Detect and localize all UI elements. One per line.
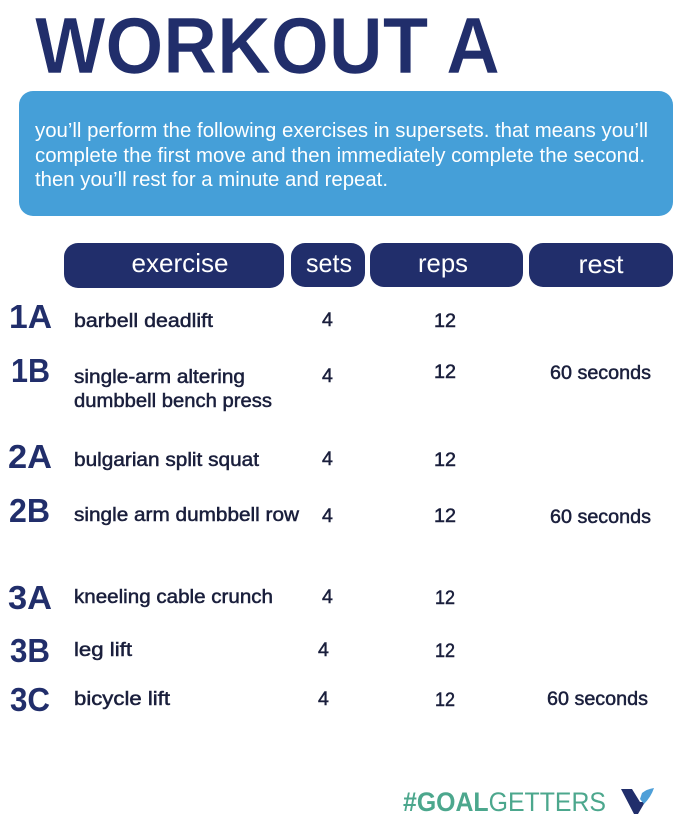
- row 2B: single arm dumbbell row: [74, 504, 300, 526]
- row 2B: 60 seconds: [550, 506, 651, 528]
- header: rest: rest: [578, 249, 624, 279]
- row 3C: 3C: [10, 681, 50, 718]
- title: WORKOUT A: [35, 1, 500, 90]
- row 1B: 12: [434, 361, 456, 383]
- header: exercise: exercise: [132, 248, 228, 278]
- row 1B: single-arm altering: [74, 366, 245, 388]
- row 3C: 12: [435, 689, 455, 711]
- header: reps: [370, 243, 523, 287]
- row 2B: 2B: [9, 492, 50, 529]
- row 2B: 4: [322, 505, 333, 527]
- row 3A: kneeling cable crunch: [74, 586, 273, 608]
- row 3B: [10, 632, 455, 669]
- header: sets: [291, 243, 365, 287]
- row 2A: 4: [322, 448, 333, 470]
- table header: [64, 243, 673, 288]
- header: reps: reps: [418, 248, 468, 278]
- row 2B: [9, 492, 651, 529]
- panel: intro: [19, 91, 673, 216]
- row 1B: [11, 352, 651, 412]
- row 3B: 4: [318, 639, 329, 661]
- row 1B: 60 seconds: [550, 362, 651, 384]
- row 1A: 12: [434, 310, 456, 332]
- row 1A: 1A: [9, 298, 52, 335]
- row 1B: 4: [322, 365, 333, 387]
- panel: intro: complete the first move and then immediately complete the second.: [35, 145, 645, 167]
- row 1B: dumbbell bench press: [74, 390, 272, 412]
- header: rest: [529, 243, 673, 287]
- row 3C: 60 seconds: [547, 688, 648, 710]
- row 3C: 4: [318, 688, 329, 710]
- row 1B: 1B: [11, 352, 50, 389]
- row 3A: 12: [435, 587, 455, 609]
- row 3C: [10, 681, 648, 718]
- row 2A: bulgarian split squat: [74, 449, 260, 471]
- row 3A: [8, 579, 455, 616]
- row 1A: 4: [322, 309, 333, 331]
- row 2A: [8, 438, 456, 475]
- row 3A: 4: [322, 586, 333, 608]
- row 1A: barbell deadlift: [74, 310, 214, 332]
- row 3B: leg lift: [74, 639, 133, 661]
- panel: intro: then you’ll rest for a minute and repeat.: [35, 169, 388, 191]
- row 1A: [9, 298, 456, 335]
- row 3B: 12: [435, 640, 455, 662]
- icon: logo: [621, 788, 654, 814]
- row 3B: 3B: [10, 632, 50, 669]
- header: sets: sets: [306, 248, 352, 278]
- row 2A: 2A: [8, 438, 52, 475]
- panel: intro: you’ll perform the following exercises in supersets. that means you’ll: [35, 120, 648, 142]
- header: exercise: [64, 243, 284, 288]
- row 3C: bicycle lift: [74, 688, 171, 710]
- row 2A: 12: [434, 449, 456, 471]
- hashtag: #GOALGETTERS: [403, 787, 606, 817]
- row 3A: 3A: [8, 579, 52, 616]
- row 2B: 12: [434, 505, 456, 527]
